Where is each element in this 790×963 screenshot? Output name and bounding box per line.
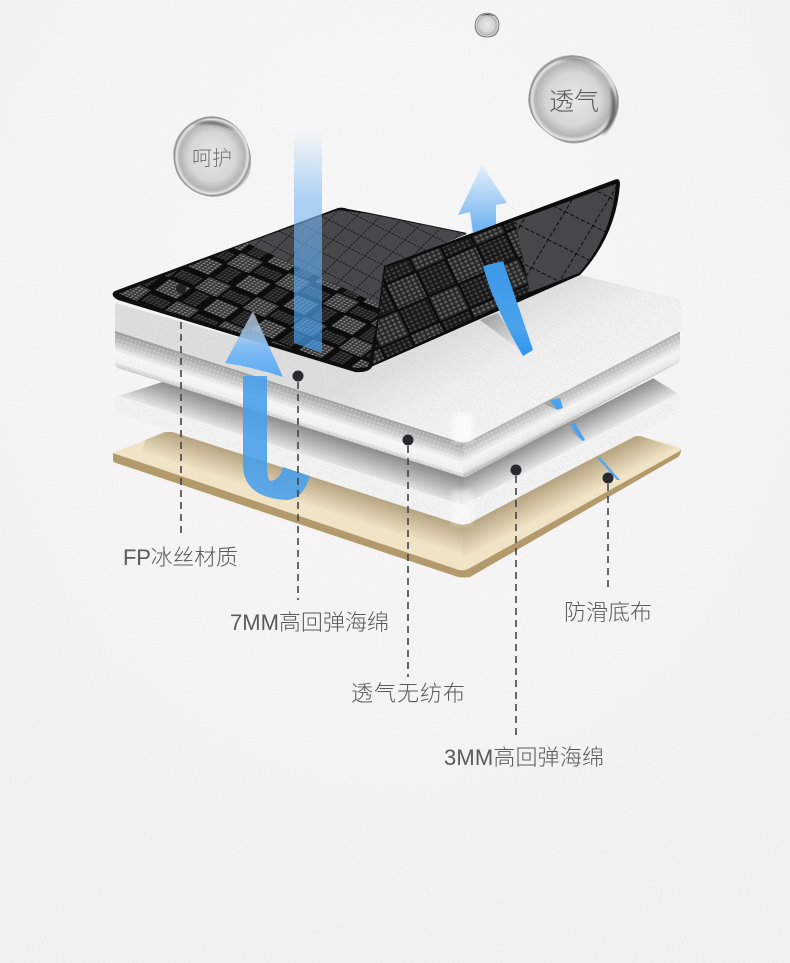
layer: 3MM foam [116, 378, 680, 528]
text: 透气: 透气 [549, 88, 599, 116]
dashed leader lines [181, 322, 608, 737]
label: 3MM高回弹海绵: 3MM高回弹海绵 [444, 745, 604, 770]
marker dots [292, 370, 614, 484]
flap leather underside [515, 184, 616, 292]
text: 呵护: 呵护 [192, 147, 232, 170]
arrow: U-shaped airflow [225, 311, 310, 500]
water drop: 呵护 [173, 116, 251, 197]
layer: 7MM foam [115, 275, 681, 442]
label: 7MM高回弹海绵: 7MM高回弹海绵 [230, 610, 389, 635]
arrow: ribbon through the flap [483, 261, 533, 356]
ice silk woven surface [118, 243, 380, 368]
arrow: upward airflow [458, 165, 507, 233]
mat marker [176, 284, 186, 294]
blue air stream fragments on non-woven [543, 398, 585, 441]
flap woven underside [373, 221, 530, 364]
layer: anti-slip base fabric [113, 432, 681, 578]
layer: breathable non-woven [115, 330, 680, 477]
water drop: small [475, 13, 499, 37]
water drop: 透气 [528, 55, 619, 144]
panel: folded flap [371, 179, 620, 367]
arrow: downward airflow [294, 130, 322, 353]
label: 透气无纺布: 透气无纺布 [351, 681, 465, 706]
label: 防滑底布: 防滑底布 [564, 600, 652, 625]
label: FP冰丝材质: FP冰丝材质 [123, 545, 238, 570]
panel: black mat surface [113, 208, 467, 372]
leather quilted surface [247, 210, 467, 305]
blue air stream on base fabric [597, 457, 620, 480]
